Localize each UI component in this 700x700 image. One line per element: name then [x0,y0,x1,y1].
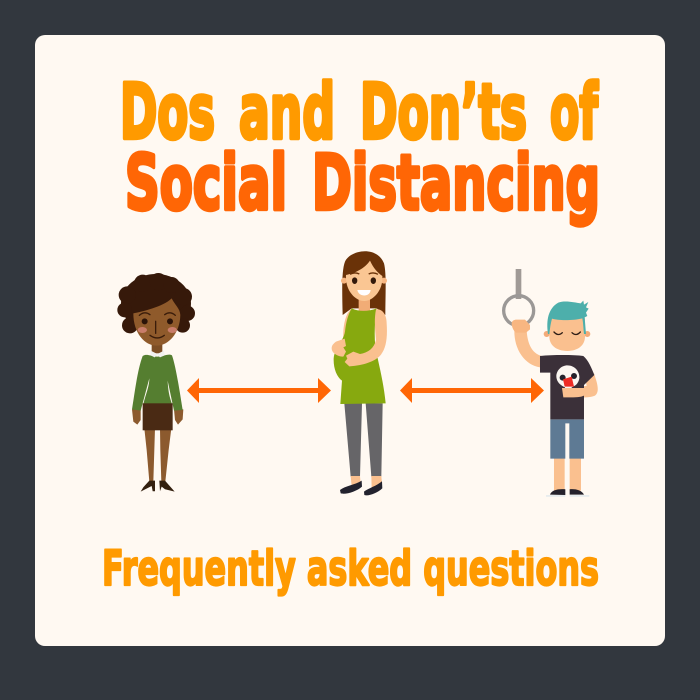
skull eyes [560,373,577,381]
t-shirt [540,355,594,419]
title line 1: of [550,67,599,156]
cheeks [138,327,147,333]
cheek right [168,327,177,333]
face [133,298,180,346]
shoes [550,489,584,495]
hand [512,320,530,333]
arrow: left pair [187,378,331,403]
shoe soles [546,494,589,498]
right arm [345,309,387,366]
phone [563,377,574,387]
hand holding phone [562,386,590,397]
eyebrows [350,273,378,274]
eyes [352,277,376,284]
panel: card [35,35,665,646]
shoes [141,481,175,492]
ankles [351,476,382,488]
legs [344,403,383,477]
shorts [550,419,584,459]
figure: woman with curly hair [117,273,195,492]
ears [544,331,590,337]
figure: man on transit [504,269,598,496]
arrow: right pair [400,378,544,403]
smile [357,290,371,295]
lower arm [562,373,598,398]
neck [359,297,370,312]
teal hair [547,301,589,334]
strap [516,269,521,299]
handle ring [504,296,534,326]
title line 2: Social [125,138,287,227]
sweater [132,355,183,411]
shirt skull [556,365,579,392]
dress [334,308,386,404]
title line 1: Dos [120,67,215,156]
raised arm [514,330,542,367]
closed eyes [554,332,580,335]
title line 1: and [239,67,335,156]
face [549,318,585,351]
skirt [143,403,173,430]
hair [117,273,195,333]
collar [151,351,165,357]
legs [554,457,581,491]
left upper arm [343,309,353,340]
neck [152,342,162,353]
hands [132,409,183,425]
facial lines [139,313,175,338]
title line 2 [125,138,600,227]
long hair [342,251,386,315]
shoes [340,481,382,495]
left hand [332,339,346,357]
legs [144,428,171,482]
ears [341,278,387,284]
figure: pregnant woman [332,251,387,495]
title line 1: Don’ts [360,67,527,156]
face [346,261,382,301]
eyes [142,318,173,324]
title line 1 [120,67,599,156]
